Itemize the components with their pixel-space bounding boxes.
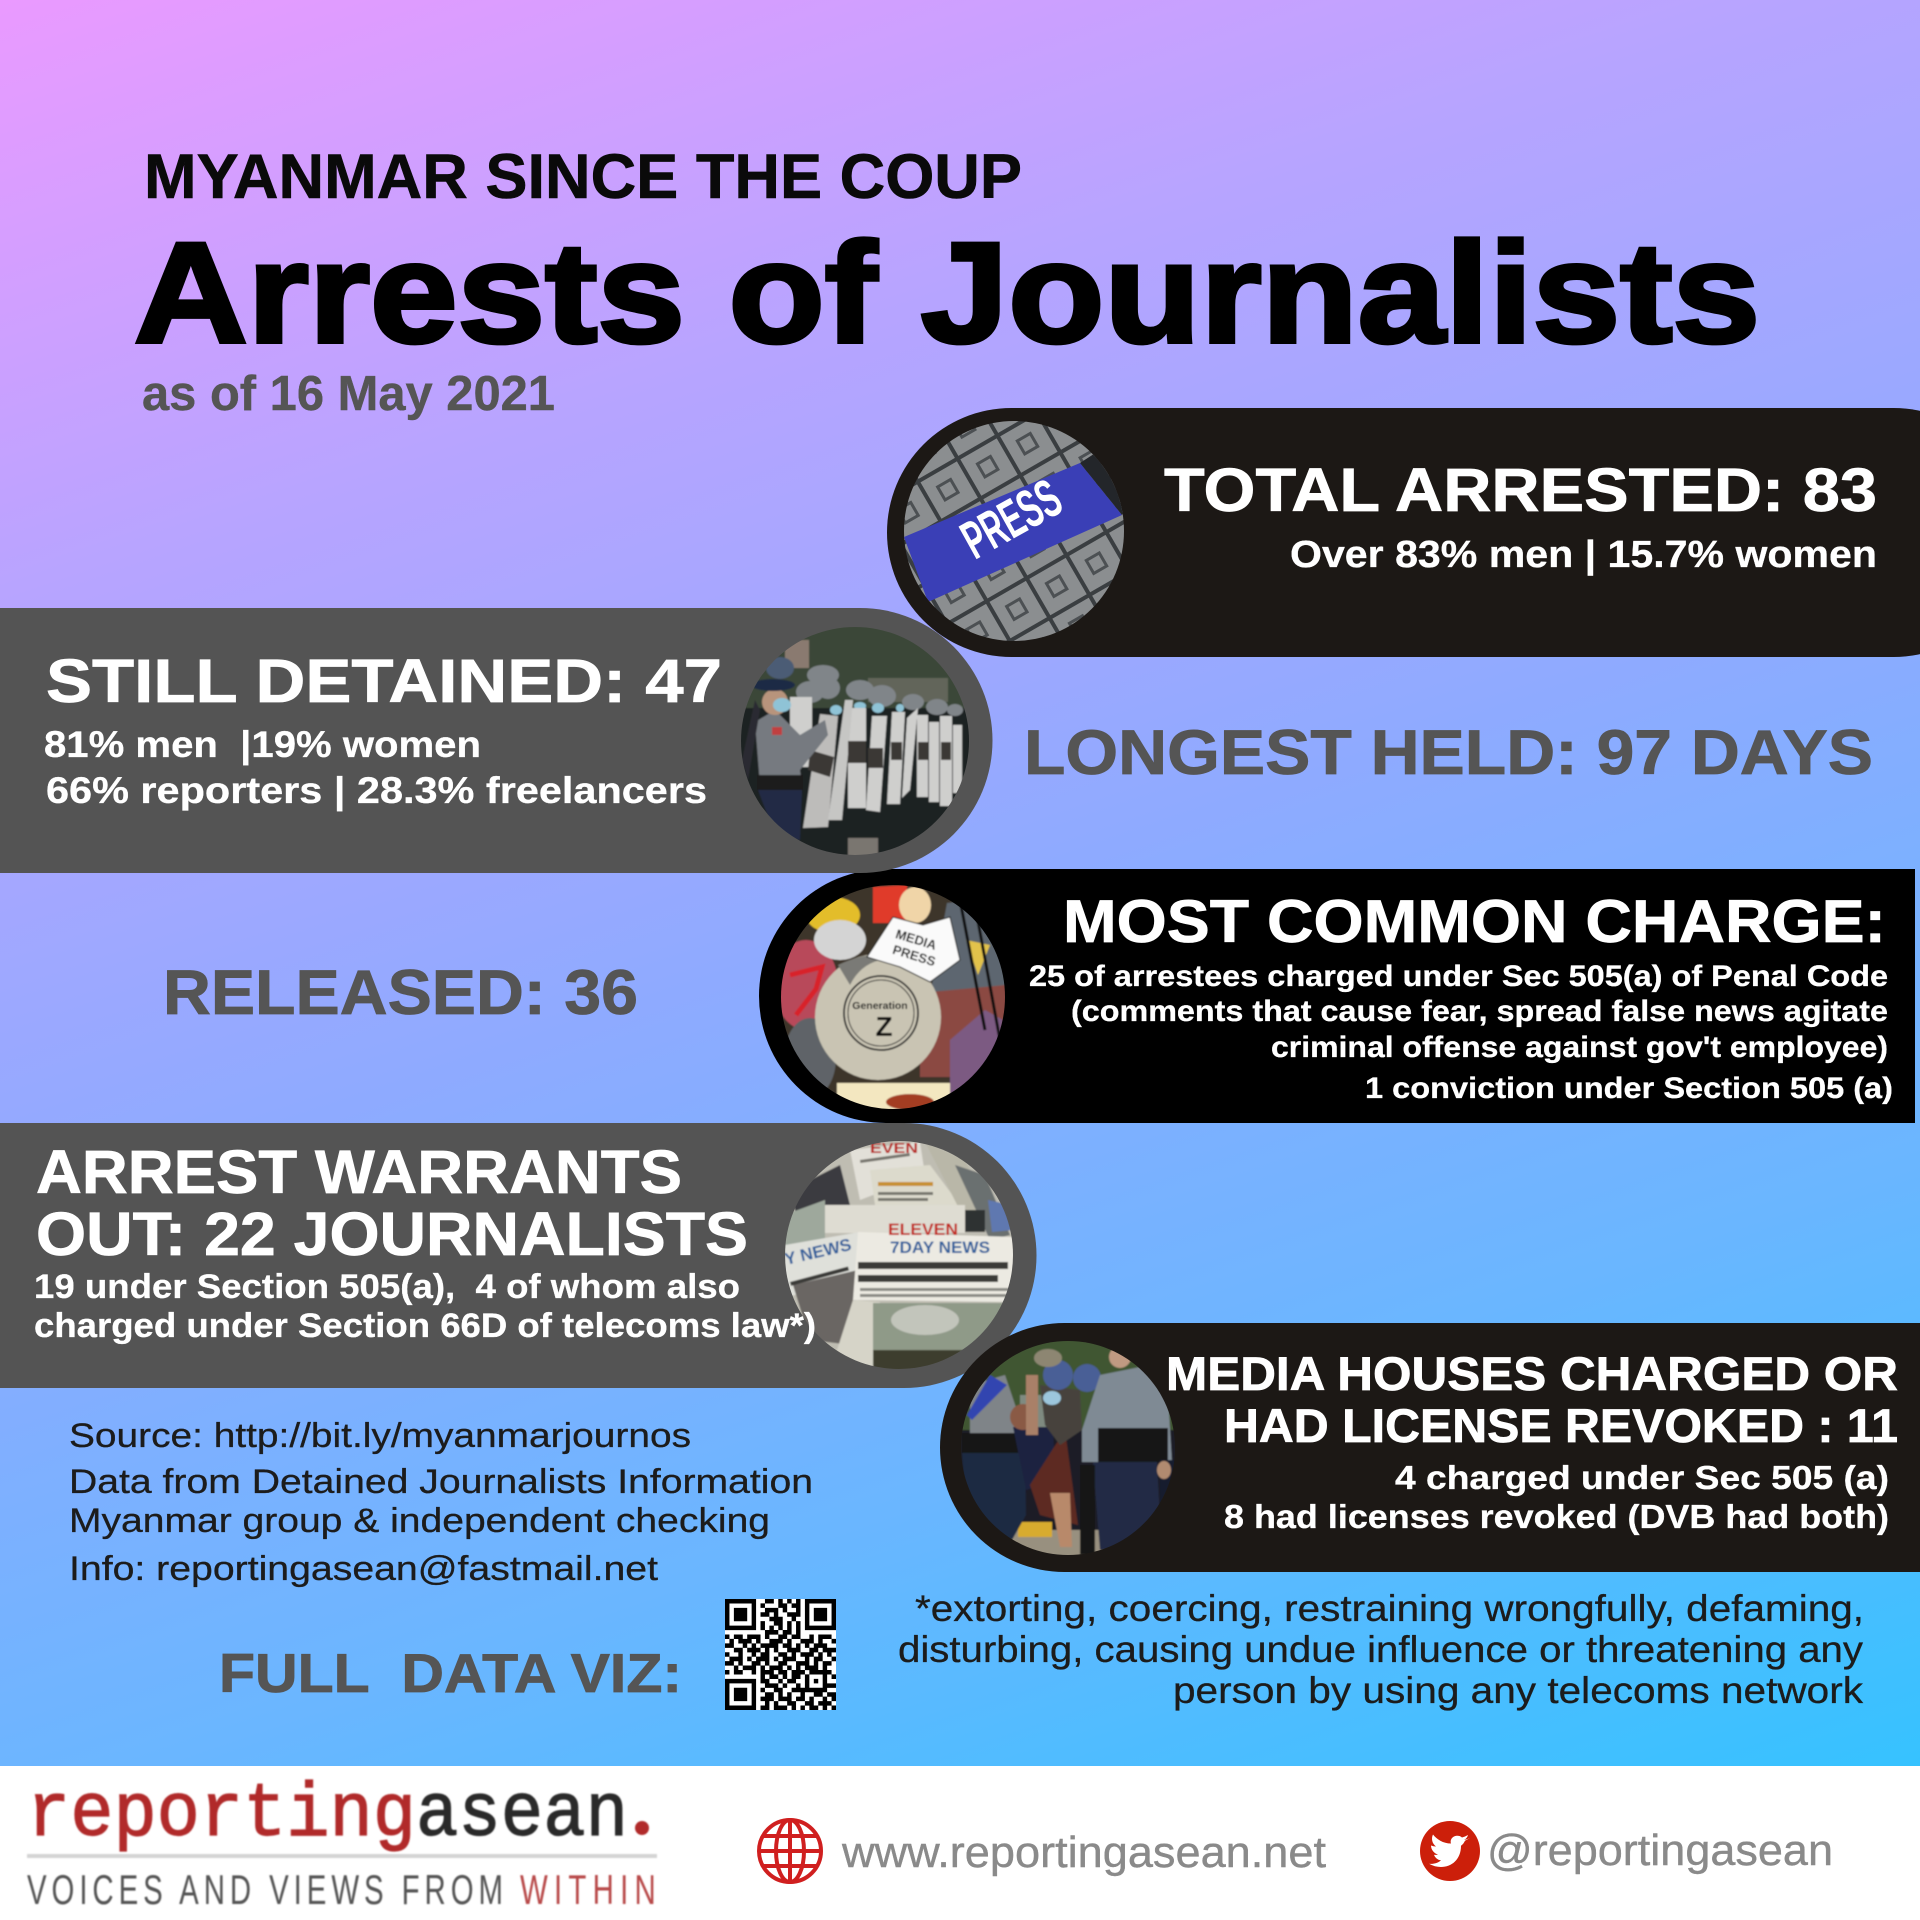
stat heading: TOTAL ARRESTED: 83	[1164, 456, 1877, 524]
footnote text: disturbing, causing undue influence or threatening any	[898, 1629, 1864, 1670]
twitter handle: @reportingasean	[1487, 1826, 1833, 1875]
photo: stacked newspapers: ELEVEN	[888, 1220, 958, 1239]
photo: stacked newspapers: EVEN	[870, 1140, 918, 1157]
website url: www.reportingasean.net	[841, 1828, 1326, 1877]
stat: released: RELEASED: 36	[163, 958, 638, 1028]
photo: stacked newspapers: 7DAY NEWS	[890, 1238, 990, 1257]
photo: generation Z illustration	[774, 884, 1006, 1113]
source text block: Info: reportingasean@fastmail.net	[69, 1550, 659, 1588]
source text block: Data from Detained Journalists Information	[69, 1463, 813, 1501]
photo: riot police line	[740, 626, 972, 858]
stat detail: Over 83% men | 15.7% women	[1290, 534, 1877, 576]
photo: stacked newspapers	[783, 1140, 1016, 1373]
charge detail text: criminal offense against gov't employee)	[1271, 1031, 1888, 1064]
logo: reportingasean: WITHIN	[520, 1866, 656, 1913]
stat detail: gender: 81% men |19% women	[44, 724, 481, 766]
kicker heading: MYANMAR SINCE THE COUP	[144, 142, 1022, 212]
charge detail text: 25 of arrestees charged under Sec 505(a) of Penal Code	[1029, 960, 1888, 993]
photo: police detaining a man	[960, 1340, 1176, 1560]
logo: reportingasean: VOICES AND VIEWS FROM	[27, 1866, 503, 1913]
header block	[134, 142, 1760, 421]
charge detail text	[1029, 960, 1893, 1105]
source text block: Myanmar group & independent checking	[69, 1502, 770, 1540]
stat: longest held: LONGEST HELD: 97 DAYS	[1024, 718, 1873, 788]
panel: arrest warrants	[0, 1123, 1036, 1388]
photo: generation Z illustration: PRESS	[891, 942, 938, 969]
footnote text: person by using any telecoms network	[1173, 1670, 1864, 1711]
media houses heading: HAD LICENSE REVOKED : 11	[1224, 1399, 1898, 1452]
logo: reportingasean: reporting	[27, 1772, 416, 1858]
panel: still detained	[0, 608, 992, 873]
warrants detail: 19 under Section 505(a), 4 of whom also	[34, 1268, 740, 1306]
panel: most common charge	[759, 869, 1915, 1123]
photo: stacked newspapers: Y NEWS	[783, 1235, 853, 1269]
date line: as of 16 May 2021	[142, 367, 555, 421]
footnote text: *extorting, coercing, restraining wrongfully, defaming,	[915, 1588, 1864, 1629]
warrants heading: ARREST WARRANTS	[36, 1138, 682, 1206]
photo: generation Z illustration: Generation	[852, 1000, 908, 1012]
icon: twitter	[1420, 1821, 1480, 1881]
charge heading: MOST COMMON CHARGE:	[1063, 888, 1886, 955]
icon: globe	[759, 1820, 821, 1882]
panel: media houses	[940, 1323, 1920, 1572]
logo: reportingasean: asean	[416, 1772, 628, 1858]
photo: generation Z illustration: Z	[875, 1011, 893, 1042]
charge detail text: 1 conviction under Section 505 (a)	[1365, 1072, 1893, 1105]
photo: press armband on patterned floor: PRESS	[951, 468, 1072, 571]
logo: reportingasean	[27, 1772, 657, 1913]
panel: total arrested	[887, 408, 1920, 657]
media houses heading	[1166, 1347, 1898, 1452]
photo: generation Z illustration: MEDIA	[894, 926, 939, 953]
footer band	[0, 1766, 1920, 1920]
main title: Arrests of Journalists	[134, 214, 1760, 373]
warrants detail	[34, 1268, 816, 1345]
footnote text	[898, 1588, 1864, 1711]
media houses detail: 4 charged under Sec 505 (a)	[1395, 1459, 1889, 1496]
photo: press armband on patterned floor	[900, 418, 1130, 644]
stat heading: STILL DETAINED: 47	[46, 647, 722, 715]
warrants detail: charged under Section 66D of telecoms law*)	[34, 1307, 816, 1345]
media houses heading: MEDIA HOUSES CHARGED OR	[1166, 1347, 1898, 1400]
media houses detail	[1224, 1459, 1889, 1535]
media houses detail: 8 had licenses revoked (DVB had both)	[1224, 1498, 1889, 1535]
source text block	[69, 1417, 813, 1588]
warrants heading	[36, 1138, 748, 1268]
QR code	[725, 1599, 836, 1710]
warrants heading: OUT: 22 JOURNALISTS	[36, 1200, 748, 1268]
stat detail: role: 66% reporters | 28.3% freelancers	[46, 770, 707, 812]
source text block: Source: http://bit.ly/myanmarjournos	[69, 1417, 691, 1455]
charge detail text: (comments that cause fear, spread false news agitate	[1071, 995, 1888, 1028]
full data viz label: FULL DATA VIZ:	[219, 1642, 682, 1704]
